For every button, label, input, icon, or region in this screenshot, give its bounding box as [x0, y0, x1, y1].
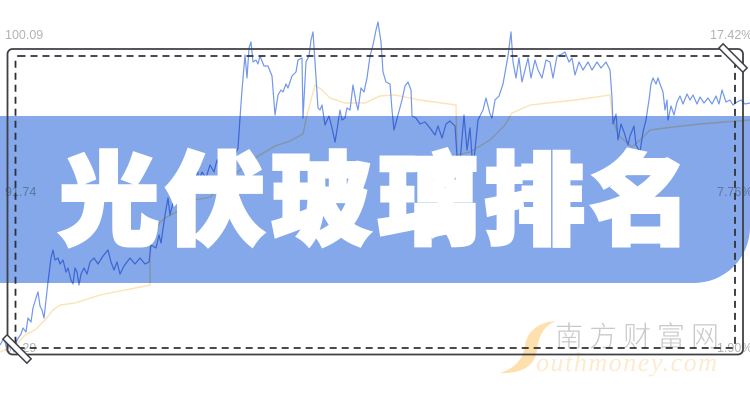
watermark logo swoosh — [500, 321, 556, 373]
axis label: bottom left: 84.29 — [5, 341, 36, 355]
average line — [0, 85, 750, 352]
axis label: top left: 100.09 — [5, 28, 43, 42]
watermark chinese name: 南方财富网 — [555, 321, 719, 352]
axis label: middle left: 91.74 — [5, 185, 36, 199]
corner tab: bottom left — [3, 335, 31, 363]
title: 光伏玻璃排名 — [59, 146, 697, 258]
dashed inner frame — [16, 56, 735, 348]
corner tab: top right — [719, 44, 747, 72]
solid frame — [8, 49, 743, 354]
blue title band — [0, 116, 750, 283]
watermark url: outhmoney.com — [536, 348, 717, 377]
